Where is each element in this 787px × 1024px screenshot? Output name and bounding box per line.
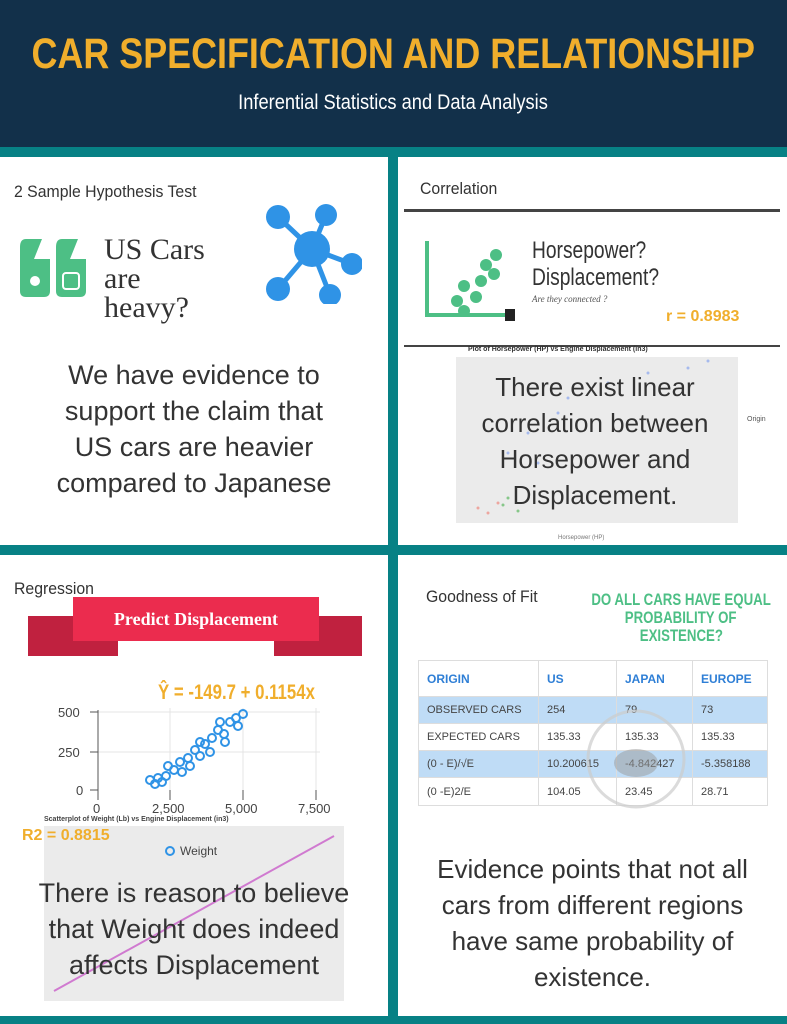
chart: regression scatter: 250 xyxy=(58,745,80,760)
icon: cloud circle xyxy=(586,710,686,808)
text: gof conclusion: cars from different regions xyxy=(442,890,743,920)
title: CAR SPECIFICATION AND RELATIONSHIP xyxy=(32,30,755,78)
panel: correlation: Are they connected ? xyxy=(532,294,607,304)
table: 135.33 xyxy=(701,731,735,743)
chart: regression scatter: 7,500 xyxy=(298,801,331,816)
text: correlation conclusion xyxy=(482,372,708,510)
panel: goodness of fit xyxy=(398,555,787,1016)
panel: correlation xyxy=(398,157,787,545)
text: question: PROBABILITY OF xyxy=(625,608,737,627)
text: question: Horsepower? xyxy=(532,237,646,264)
chart: regression scatter: 5,000 xyxy=(225,801,258,816)
chart: scatter HP vs displacement: Plot of Horsepower (HP) vs Engine Displacement (in3) xyxy=(468,346,648,353)
table: ORIGIN xyxy=(427,672,470,686)
text: US Cars are heavy: US Cars xyxy=(104,233,205,266)
text: conclusion: compared to Japanese xyxy=(57,468,331,498)
text: gof conclusion: Evidence points that not all xyxy=(437,854,748,884)
text: conclusion: support the claim that xyxy=(65,396,323,426)
table: EUROPE xyxy=(701,672,752,686)
chart: regression scatter: 500 xyxy=(58,705,80,720)
table: 10.200615 xyxy=(547,758,599,770)
text: regression conclusion: There is reason to believe xyxy=(39,878,349,908)
table: -4.842427 xyxy=(625,758,675,770)
heading: Goodness of Fit xyxy=(426,587,538,606)
text: question: Displacement? xyxy=(532,264,659,291)
text: correlation conclusion: There exist linear xyxy=(495,372,695,402)
table: 135.33 xyxy=(625,731,659,743)
table: EXPECTED CARS xyxy=(427,731,520,743)
table: 73 xyxy=(701,704,713,716)
table: -5.358188 xyxy=(701,758,751,770)
text: US Cars are heavy: are xyxy=(104,262,141,295)
icon: scatter xyxy=(425,241,515,321)
subtitle: Inferential Statistics and Data Analysis xyxy=(239,91,548,114)
text: conclusion: US cars are heavier xyxy=(75,432,313,462)
text: question xyxy=(591,590,771,645)
text: gof conclusion: existence. xyxy=(534,962,651,992)
panel: regression xyxy=(0,555,388,1016)
text: regression conclusion: that Weight does indeed xyxy=(49,914,339,944)
text: conclusion: We have evidence to xyxy=(68,360,320,390)
chart: scatter HP vs displacement xyxy=(456,346,766,541)
text: r value: r = 0.8983 xyxy=(666,308,739,325)
chart: scatter HP vs displacement: Horsepower (HP) xyxy=(558,535,604,541)
chart: weight scatter xyxy=(44,826,344,1001)
table: 79 xyxy=(625,704,637,716)
text: correlation conclusion: Displacement. xyxy=(513,480,677,510)
table: 135.33 xyxy=(547,731,581,743)
text: correlation conclusion: correlation between xyxy=(482,408,708,438)
text: equation: Ŷ = -149.7 + 0.1154x xyxy=(158,681,315,704)
icon: network xyxy=(266,204,362,304)
text: question: DO ALL CARS HAVE EQUAL xyxy=(591,590,771,609)
banner: predict displacement xyxy=(28,597,362,656)
table: 104.05 xyxy=(547,786,581,798)
text: US Cars are heavy xyxy=(104,233,205,324)
table: OBSERVED CARS xyxy=(427,704,522,716)
text: gof conclusion: have same probability of xyxy=(452,926,733,956)
text: question: EXISTENCE? xyxy=(639,626,723,645)
text: regression conclusion: affects Displacement xyxy=(69,950,319,980)
table: (0 - E)/√E xyxy=(427,758,474,770)
table: (0 -E)2/E xyxy=(427,786,471,798)
chart: regression scatter: 0 xyxy=(76,783,83,798)
heading: Correlation xyxy=(420,179,497,198)
header xyxy=(0,0,787,147)
text: US Cars are heavy: heavy? xyxy=(104,291,189,324)
table: 28.71 xyxy=(701,786,729,798)
table: 254 xyxy=(547,704,565,716)
chart: scatter HP vs displacement: Origin xyxy=(747,416,766,423)
icon: quote xyxy=(20,239,86,297)
chart: regression scatter: 0 xyxy=(93,801,100,816)
chart: regression scatter: 2,500 xyxy=(152,801,185,816)
chart: weight scatter: Weight xyxy=(180,844,218,858)
text: conclusion xyxy=(57,360,331,498)
table xyxy=(418,660,768,806)
table: JAPAN xyxy=(625,672,665,686)
text: R2: R2 = 0.8815 xyxy=(22,827,110,844)
panel: regression: Scatterplot of Weight (Lb) vs Engine Displacement (in3) xyxy=(44,816,229,823)
text: gof conclusion xyxy=(437,854,748,992)
banner: predict displacement: Predict Displacement xyxy=(114,609,278,629)
table: 23.45 xyxy=(625,786,653,798)
table: US xyxy=(547,672,564,686)
panel: hypothesis test xyxy=(0,157,388,545)
chart: regression scatter xyxy=(58,705,331,816)
text: regression conclusion xyxy=(39,878,349,980)
text: correlation conclusion: Horsepower and xyxy=(500,444,690,474)
heading: 2 Sample Hypothesis Test xyxy=(14,182,196,201)
heading: Regression xyxy=(14,579,94,598)
text: question xyxy=(532,237,659,291)
